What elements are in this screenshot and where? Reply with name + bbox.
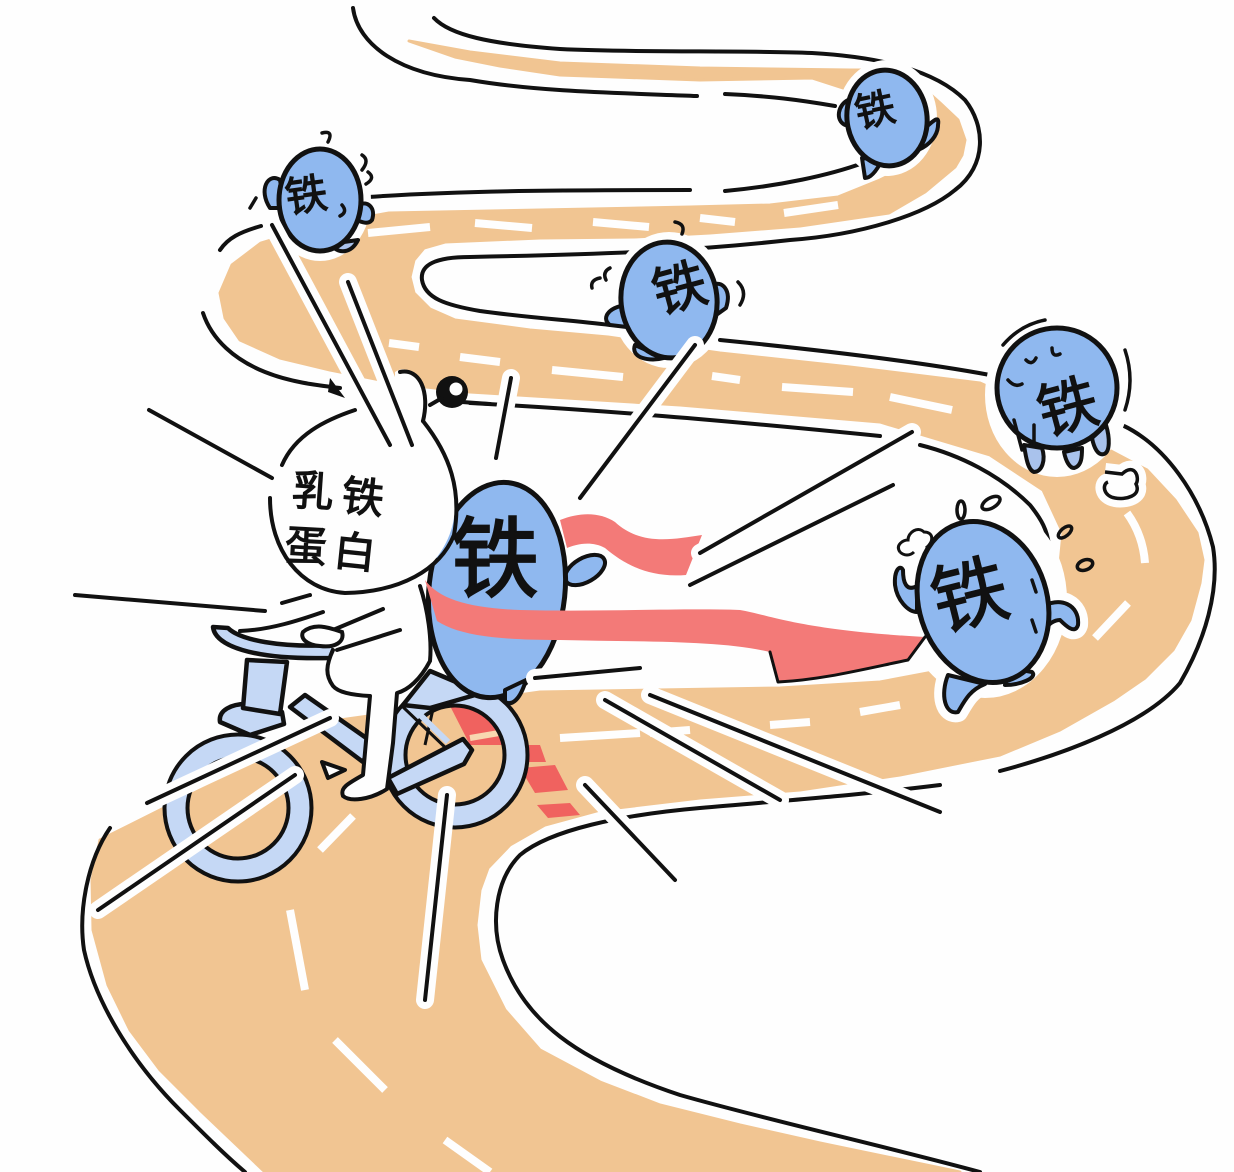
ribbon tail outline bbox=[770, 637, 925, 682]
large iron character on bicycle bbox=[418, 475, 610, 705]
rabbit arm lines bbox=[240, 609, 400, 650]
handlebar bbox=[213, 627, 335, 658]
rabbit hand bbox=[302, 627, 343, 646]
speed lines bbox=[75, 225, 940, 1000]
rabbit rider bbox=[240, 369, 490, 799]
lane dashes bbox=[290, 205, 1145, 1172]
rabbit body outline bbox=[327, 586, 431, 799]
iron character top right bbox=[839, 65, 938, 178]
iron character upper right bbox=[995, 320, 1137, 498]
label: 铁 bbox=[1030, 367, 1106, 448]
frame bbox=[290, 695, 372, 762]
front wheel bbox=[176, 746, 300, 870]
label: lactoferrin: 铁 bbox=[339, 472, 386, 523]
label: 铁 bbox=[451, 510, 539, 609]
seat bbox=[403, 671, 482, 708]
red ribbon bbox=[425, 514, 925, 682]
rabbit ear bbox=[395, 369, 425, 430]
label: 铁 bbox=[923, 546, 1017, 647]
label: 铁 bbox=[851, 85, 899, 137]
head tube bbox=[243, 660, 287, 714]
label: lactoferrin: 乳 bbox=[290, 467, 335, 516]
label: lactoferrin: 白 bbox=[331, 527, 378, 578]
label: lactoferrin: 蛋 bbox=[284, 522, 328, 571]
red finish line bbox=[448, 698, 580, 818]
label: lactoferrin bbox=[284, 467, 386, 578]
ribbon upper tail bbox=[560, 514, 702, 575]
label: 铁 bbox=[646, 253, 714, 325]
iron character lower right bbox=[895, 494, 1094, 712]
rabbit body fill bbox=[327, 586, 430, 799]
rear wheel bbox=[394, 694, 516, 816]
pedal bar bbox=[388, 739, 472, 794]
bicycle bbox=[176, 627, 516, 870]
dust puff bbox=[898, 530, 932, 555]
iron character middle bbox=[592, 222, 744, 363]
pedal bbox=[322, 762, 345, 778]
iron character left bbox=[250, 132, 373, 251]
dust puff bbox=[1104, 470, 1137, 498]
ribbon main tail bbox=[425, 580, 925, 682]
fork crown bbox=[220, 704, 284, 735]
eye bbox=[436, 376, 468, 408]
road line arrow tip bbox=[328, 378, 345, 398]
rabbit head bbox=[269, 417, 455, 593]
label: 铁 bbox=[282, 169, 330, 222]
